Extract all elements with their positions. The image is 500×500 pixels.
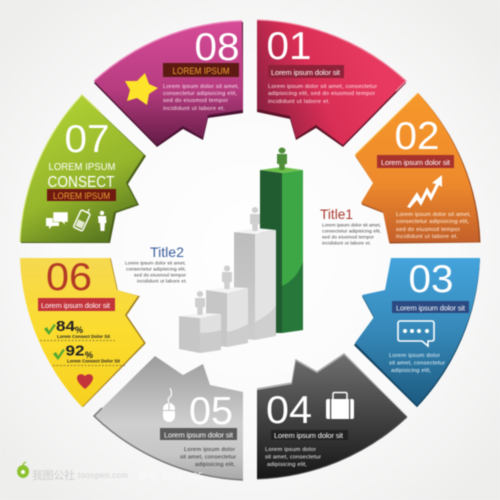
icon: computer mouse: [163, 388, 175, 422]
text: 04 body: sit amet, consectetur: [265, 454, 321, 460]
label bar: 01: [268, 65, 344, 78]
stat: 92%: [53, 342, 125, 366]
text: 05 body: [180, 447, 236, 468]
panel: 04: [257, 354, 407, 479]
number: 06: 06: [46, 256, 92, 299]
stat: 84%: [40, 318, 115, 340]
stat: 92%: 92: [66, 342, 84, 360]
text: 02 body: sed do eiusmod tempor: [396, 227, 460, 233]
text block: Title1: [320, 206, 381, 246]
text block: Title2: incididunt ut labore et.: [137, 278, 187, 284]
heading: 07: [48, 161, 116, 191]
text: 08 body: [163, 84, 239, 112]
panel: 03: [354, 258, 480, 407]
text: 08 body: sed do eiusmod tempor: [163, 98, 228, 104]
watermark: [17, 462, 203, 482]
number: 08: 08: [194, 26, 240, 69]
icon: star: [125, 73, 158, 105]
text: 03 body: Lorem ipsum dolor: [389, 353, 440, 359]
panel: 07: [20, 95, 146, 243]
stat: 92%: %: [85, 350, 93, 360]
watermark: 我图公社: [32, 468, 75, 482]
icon: briefcase: [326, 392, 354, 419]
text block: Title1: Title1: [320, 206, 353, 222]
figure: person on column 3: [250, 207, 260, 231]
label bar: 06: Lorem ipsum dolor sit: [41, 301, 111, 310]
text: 05 body: adipisicing elit,: [195, 462, 235, 468]
stat: 92%: Lorem Consect Dolor Sit: [67, 358, 120, 364]
column 1: white: [179, 313, 221, 353]
column 2: white: [206, 287, 248, 347]
text: 04 body: Lorem ipsum dolor: [265, 447, 316, 453]
number: 05: 05: [189, 390, 233, 433]
icon: rising arrow: [407, 175, 442, 208]
text: 03 body: [389, 353, 445, 374]
text: 02 body: consectetur adipisicing elit,: [396, 219, 469, 225]
text: 01 body: incididunt ut labore et.: [268, 99, 330, 105]
text: 02 body: Lorem ipsum dolor sit amet,: [396, 212, 471, 218]
label bar: 02: [377, 155, 454, 168]
text: 08 body: consectetur adipisicing elit,: [163, 91, 237, 97]
number: 03: 03: [408, 258, 454, 301]
bar chart: people on rising columns: [179, 148, 303, 353]
stat: 84%: 84: [56, 318, 76, 335]
watermark: 编号: 20131905: [138, 470, 203, 481]
column 4: green: [260, 167, 303, 333]
stat: 84%: %: [75, 325, 83, 335]
text block: Title2: Title2: [150, 244, 184, 260]
number: 01: 01: [266, 25, 312, 68]
panel: 06: [20, 256, 146, 407]
panel: 02: [355, 93, 480, 244]
text: 02 body: [396, 212, 471, 240]
text: 01 body: [268, 84, 377, 105]
icon: heart: [77, 374, 93, 389]
text block: Title2: [125, 244, 187, 284]
number: 02: 02: [394, 115, 440, 158]
label bar: 02: Lorem ipsum dolor sit: [381, 158, 451, 167]
text: 05 body: sit amet, consectetur: [180, 454, 236, 460]
label bar: 06: [38, 298, 115, 311]
text block: Title1: incididunt ut labore et.: [322, 240, 371, 246]
text block: Title2: Lorem ipsum dolor sit amet,: [125, 260, 186, 266]
figure: person on column 1: [195, 291, 205, 315]
icon: person: [98, 211, 106, 231]
text: 08 body: Lorem ipsum dolor sit amet,: [163, 84, 239, 90]
label bar: 01: Lorem ipsum dolor sit: [271, 68, 341, 77]
text: 08 body: incididunt ut labore et.: [163, 106, 225, 112]
label bar: 03: Lorem ipsum dolor sit: [396, 304, 466, 312]
text block: Title2: sed do eiusmod tempor: [134, 272, 186, 278]
panel: 08: [94, 21, 243, 147]
icon: speech bubble: [398, 321, 434, 346]
label bar: 08: LOREM IPSUM: [172, 66, 230, 77]
text: 04 body: [265, 447, 321, 468]
text: 04 body: adipisicing elit,: [267, 462, 307, 468]
text: 01 body: Lorem ipsum dolor sit amet, consectetur: [268, 84, 377, 90]
text: 01 body: adipisicing elit, sed do eiusmod tempor: [268, 91, 375, 97]
number: 07: 07: [64, 118, 110, 161]
label bar: 08: [163, 63, 239, 77]
column 3: white: [234, 228, 276, 340]
panel: 05: [94, 356, 243, 480]
label bar: 03: [392, 301, 469, 313]
icon: chat bubbles: [46, 212, 68, 229]
text: 03 body: sit amet, consectetur: [389, 360, 445, 366]
text block: Title2: consectetur adipisicing elit,: [126, 266, 186, 272]
heading: 07: CONSECT: [48, 174, 115, 191]
text: 05 body: Lorem ipsum dolor: [184, 447, 235, 453]
panel: 01: [257, 20, 406, 147]
icon: mobile phone: [73, 206, 92, 231]
label bar: 05: [160, 428, 237, 440]
text block: Title1: consectetur adipisicing elit,: [322, 228, 381, 234]
label bar: 04: Lorem ipsum dolor sit: [274, 431, 344, 440]
figure: green person: [277, 148, 287, 170]
watermark: tooopen.com: [78, 471, 128, 480]
stat: 84%: Lorem Consect Dolor Sit: [57, 334, 110, 339]
figure: person on column 2: [222, 266, 232, 289]
text block: Title1: Lorem ipsum dolor sit amet,: [322, 222, 381, 228]
number: 04: 04: [266, 389, 312, 432]
heading: 07: LOREM IPSUM: [48, 161, 116, 173]
text block: Title1: sed do eiusmod tempor: [322, 234, 374, 240]
text: 02 body: incididunt ut labore et.: [396, 234, 458, 240]
label bar: 07: LOREM IPSUM: [53, 191, 110, 202]
text: 03 body: adipisicing elit,: [391, 368, 431, 374]
label bar: 05: Lorem ipsum dolor sit: [164, 430, 234, 440]
